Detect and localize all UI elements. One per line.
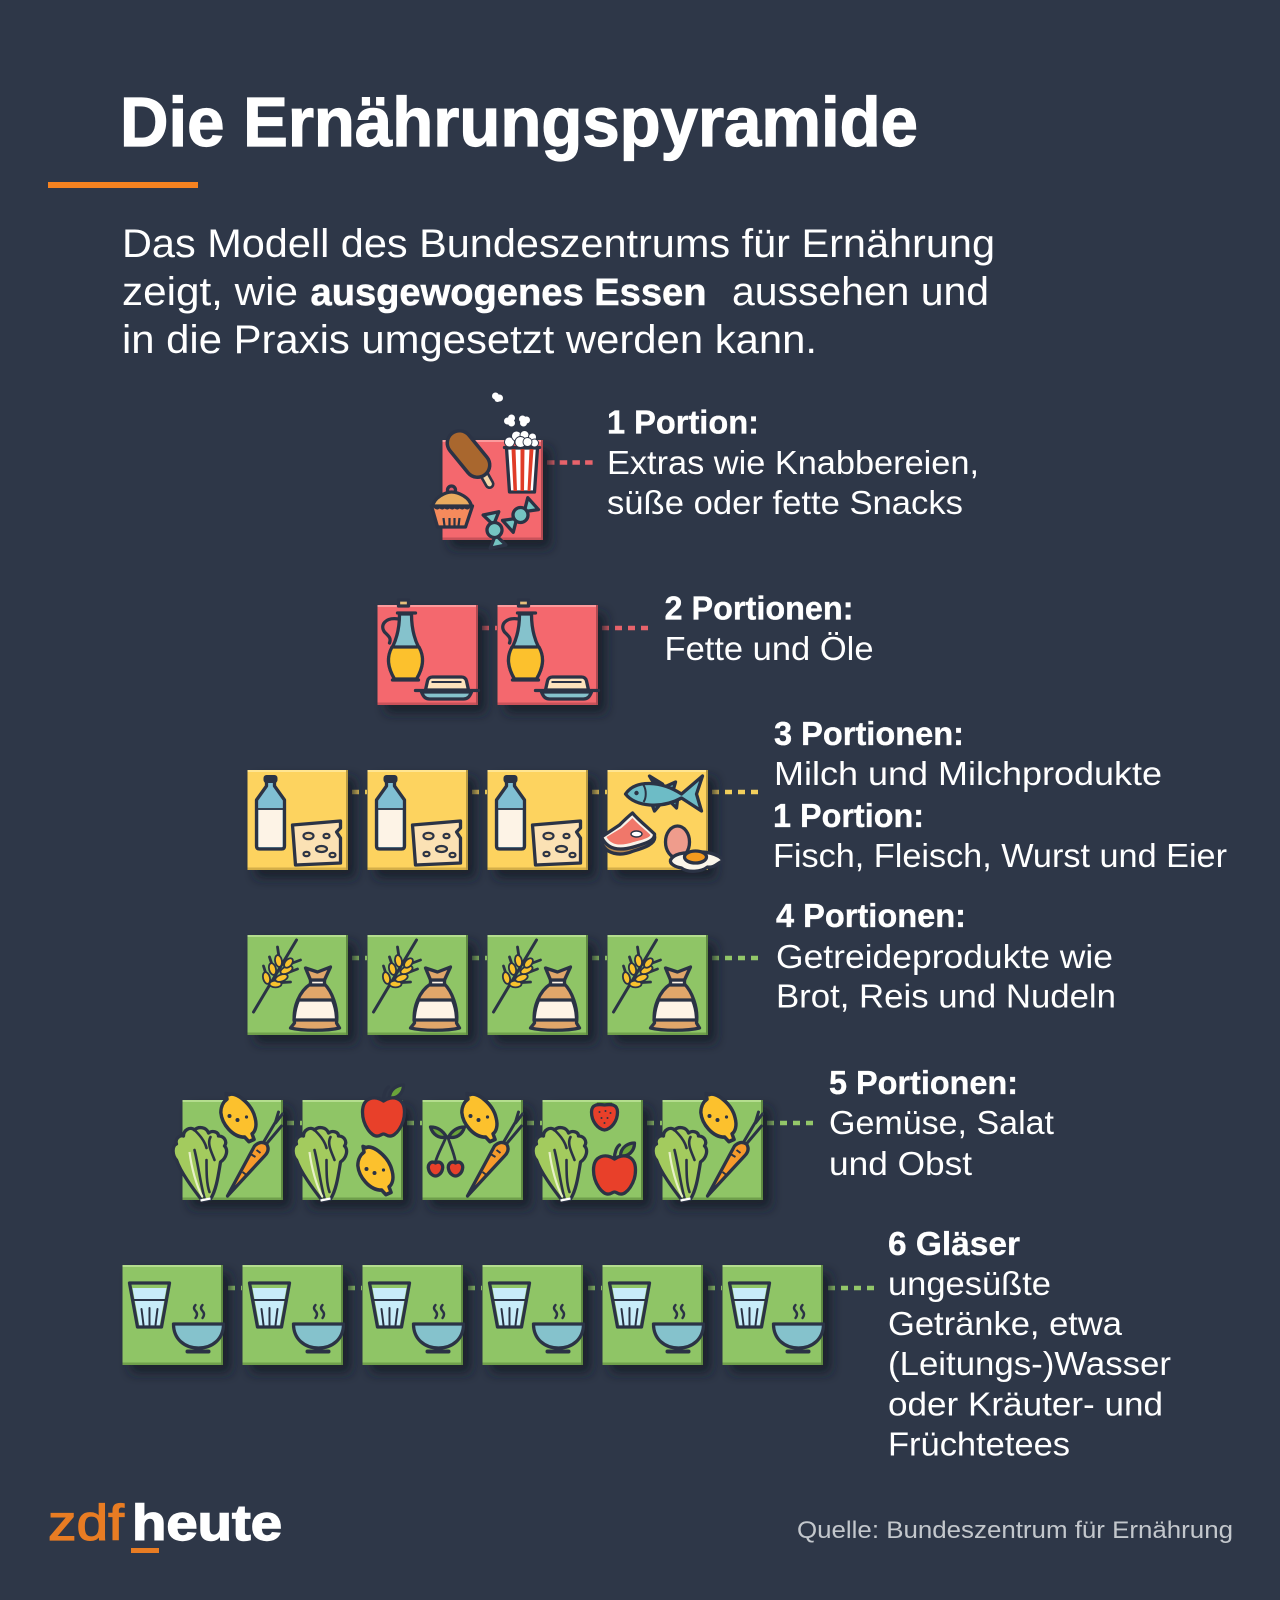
logo: zdfheute: zdf (48, 1495, 124, 1551)
label: 6 Gläser: (Leitungs-)Wasser (888, 1345, 1171, 1382)
intro text: Das Modell des Bundeszentrums für Ernährung (122, 222, 995, 266)
label: 3 Portionen and 1 Portion (773, 715, 1227, 874)
tile: vegetables and fruit 3 (422, 1093, 523, 1200)
label: 3 Portionen and 1 Portion: 1 Portion: (773, 797, 924, 834)
label: 6 Gläser: oder Kräuter- und (888, 1386, 1163, 1422)
tile: milk products 1 (248, 770, 348, 870)
label: 6 Gläser (888, 1225, 1171, 1462)
tile: grain 4 (608, 935, 708, 1035)
tile: drinks 2 (242, 1265, 344, 1365)
connector lines: row 6 (228, 1286, 877, 1290)
tile: grain 1 (248, 935, 348, 1035)
intro text: aussehen und (732, 270, 989, 314)
label: 3 Portionen and 1 Portion: 3 Portionen: (774, 715, 964, 752)
tile: drinks 4 (482, 1265, 584, 1365)
orange title rule (48, 182, 198, 188)
intro text (122, 222, 995, 362)
label: 5 Portionen: und Obst (829, 1145, 972, 1182)
intro text: in die Praxis umgesetzt werden kann. (122, 318, 817, 362)
label: 3 Portionen and 1 Portion: Milch und Milchprodukte (774, 755, 1162, 792)
title: Die Ernährungspyramide (120, 83, 918, 161)
label: 6 Gläser: Früchtetees (888, 1426, 1070, 1462)
label: 2 Portionen (664, 590, 874, 667)
label: 6 Gläser: Getränke, etwa (888, 1305, 1123, 1342)
intro text: zeigt, wie (122, 270, 298, 314)
label: 3 Portionen and 1 Portion: Fisch, Fleisch, Wurst und Eier (773, 837, 1227, 874)
label: 5 Portionen: Gemüse, Salat (829, 1104, 1054, 1141)
connector lines: row 2 (482, 626, 649, 630)
tile: vegetables and fruit 4 (533, 1100, 643, 1201)
label: 2 Portionen: 2 Portionen: (664, 590, 854, 626)
tile: vegetables and fruit 1 (173, 1093, 283, 1201)
label: 4 Portionen: Brot, Reis und Nudeln (776, 978, 1116, 1014)
label: 4 Portionen: Getreideprodukte wie (776, 938, 1113, 975)
tile: drinks 1 (122, 1265, 224, 1365)
intro text: ausgewogenes Essen (310, 272, 706, 314)
connector lines: row 4 (352, 956, 759, 960)
label: 1 Portion extras: süße oder fette Snacks (607, 484, 963, 521)
label: 6 Gläser: ungesüßte (888, 1265, 1051, 1302)
label: 2 Portionen: Fette und Öle (664, 630, 874, 667)
label: 1 Portion extras (607, 404, 979, 521)
logo: zdfheute (48, 1495, 282, 1553)
tile: milk products 3 (488, 770, 588, 870)
tile: drinks 6 (722, 1265, 824, 1365)
tile: vegetables and fruit 2 (293, 1085, 404, 1201)
connector lines: row 5 (287, 1121, 814, 1125)
label: 4 Portionen (776, 897, 1116, 1014)
source note: Quelle: Bundeszentrum für Ernährung (797, 1517, 1233, 1544)
tile: grain 2 (368, 935, 468, 1035)
tile: drinks 3 (362, 1265, 464, 1365)
tile: milk products 2 (368, 770, 468, 870)
label: 1 Portion extras: 1 Portion: (607, 404, 759, 440)
logo: zdfheute: heute (132, 1495, 282, 1551)
tile: extras snacks (432, 392, 543, 548)
tile: fats and oils 2 (498, 600, 598, 705)
connector lines: row 3 (352, 790, 759, 794)
tile: vegetables and fruit 5 (653, 1093, 763, 1201)
tile: fats and oils 1 (378, 600, 478, 705)
label: 1 Portion extras: Extras wie Knabbereien, (607, 444, 979, 481)
label: 4 Portionen: 4 Portionen: (776, 897, 966, 934)
label: 6 Gläser: 6 Gläser (888, 1225, 1020, 1262)
label: 5 Portionen (829, 1064, 1054, 1182)
tile: grain 3 (488, 935, 588, 1035)
tile: fish, meat, eggs (602, 770, 724, 871)
label: 5 Portionen: 5 Portionen: (829, 1064, 1018, 1101)
tile: drinks 5 (602, 1265, 704, 1365)
connector line: row 1 (547, 460, 595, 465)
